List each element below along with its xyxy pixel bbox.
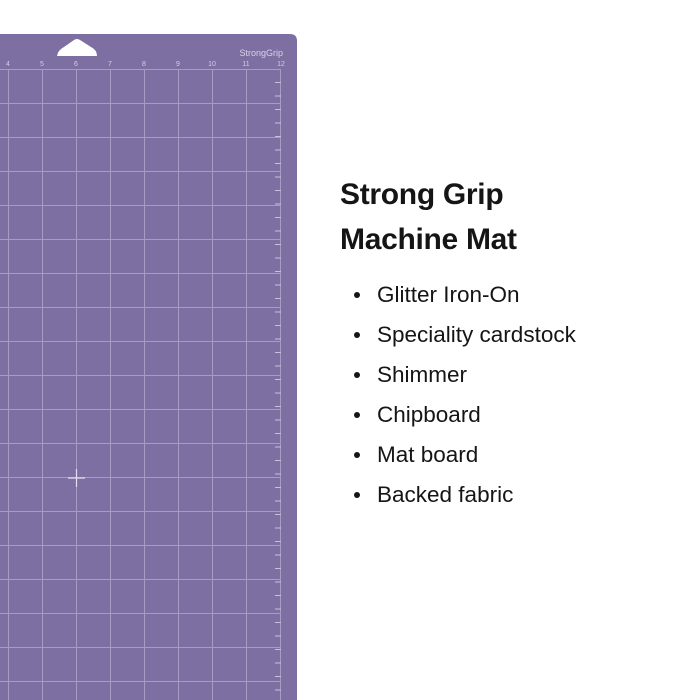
- bullet list: [354, 282, 576, 507]
- title: Strong Grip: [340, 178, 503, 211]
- item: Speciality cardstock: [377, 322, 576, 347]
- ruler numbers: [6, 61, 285, 68]
- item: Backed fabric: [377, 482, 513, 507]
- ruler ticks: [275, 82, 281, 690]
- ruler numbers: 12: [277, 61, 285, 68]
- item: Shimmer: [377, 362, 467, 387]
- title: Machine Mat: [340, 223, 517, 256]
- mat hanging hole: [57, 39, 97, 56]
- brand label: StrongGrip: [239, 48, 283, 58]
- item: Mat board: [377, 442, 478, 467]
- grid lines: [0, 69, 280, 700]
- ruler numbers: 7: [108, 61, 112, 68]
- item: Chipboard: [377, 402, 481, 427]
- item: Glitter Iron-On: [377, 282, 520, 307]
- ruler numbers: 10: [208, 61, 216, 68]
- title: [340, 178, 517, 256]
- ruler numbers: 9: [176, 61, 180, 68]
- ruler numbers: 11: [242, 61, 250, 68]
- ruler numbers: 4: [6, 61, 10, 68]
- ruler numbers: 8: [142, 61, 146, 68]
- ruler numbers: 5: [40, 61, 44, 68]
- crosshair: [68, 469, 85, 487]
- ruler numbers: 6: [74, 61, 78, 68]
